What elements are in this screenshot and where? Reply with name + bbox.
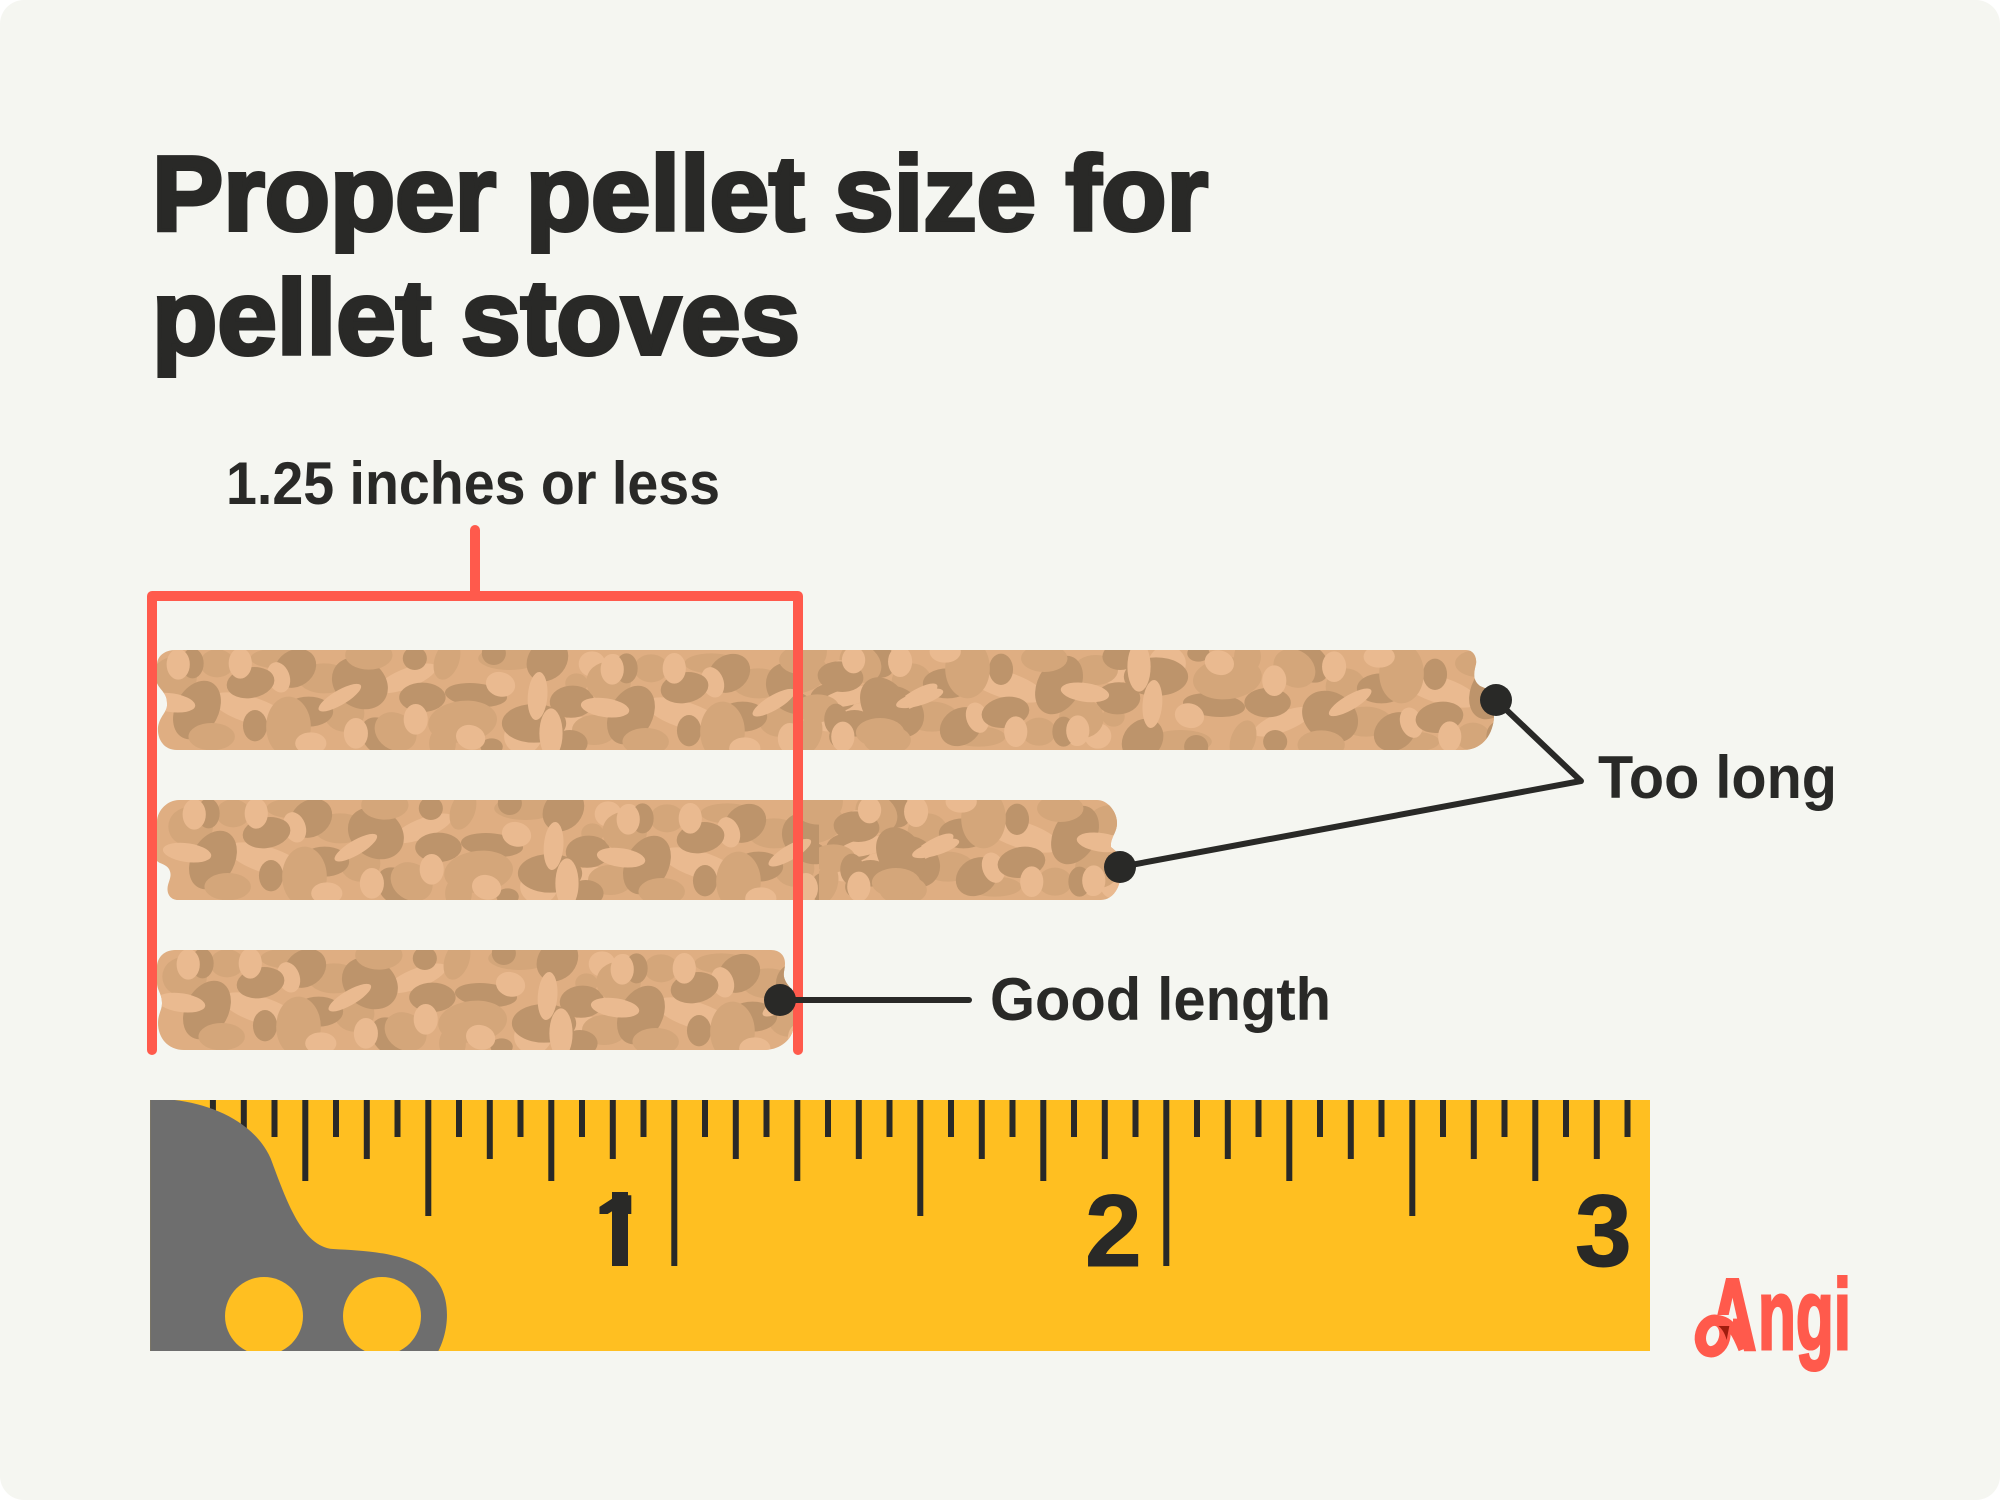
inch numbers: 2: [1085, 1174, 1142, 1288]
inch numbers: 3: [1575, 1174, 1632, 1288]
pellet: too long, middle: [157, 800, 1120, 900]
tape body: [150, 1100, 1650, 1351]
pellet: too long, top: [157, 650, 1494, 750]
callout: too long: [1104, 684, 1581, 883]
label: good length: Good length: [990, 966, 1331, 1033]
tick marks: [213, 1100, 1627, 1266]
logo: Angi: ngi: [1758, 1259, 1851, 1371]
logo: Angi: A: [1709, 1259, 1756, 1371]
tape measure: [150, 1100, 1650, 1355]
label: too long: Too long: [1598, 744, 1837, 811]
inch numbers: 1: [593, 1174, 650, 1288]
red measurement bracket: [152, 530, 798, 1050]
logo: Angi: [1694, 1275, 1848, 1372]
title: pellet stoves: [152, 259, 800, 377]
callout: good length: [764, 984, 969, 1016]
title: Proper pellet size for: [152, 135, 1208, 253]
metal hook: [150, 1100, 447, 1352]
inch numbers: [599, 1192, 1628, 1268]
hook holes: [225, 1277, 421, 1355]
label: 1.25 inches or less: 1.25 inches or less: [226, 450, 720, 517]
pellet: good length: [157, 950, 793, 1050]
title: [152, 135, 1208, 377]
